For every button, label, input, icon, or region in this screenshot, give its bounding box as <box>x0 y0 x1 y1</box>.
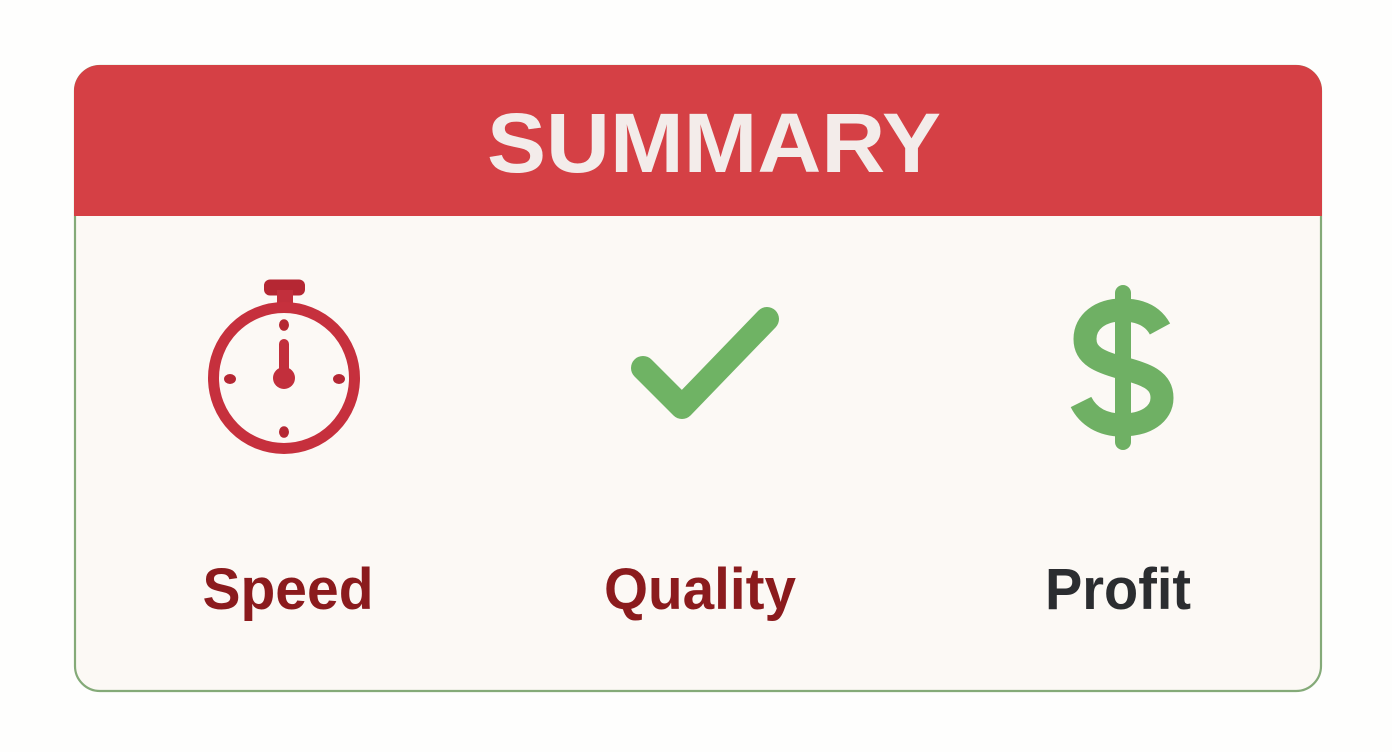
panel: summary card <box>74 65 1322 691</box>
label: quality: Quality <box>604 557 796 622</box>
icon: check mark <box>643 319 767 407</box>
label: profit: Profit <box>1045 557 1191 622</box>
panel body <box>75 66 1321 691</box>
title: SUMMARY <box>487 96 941 190</box>
icon: dollar sign <box>1081 293 1162 442</box>
header band <box>74 65 1322 216</box>
icon: stopwatch <box>214 280 354 448</box>
label: speed: Speed <box>202 557 374 622</box>
